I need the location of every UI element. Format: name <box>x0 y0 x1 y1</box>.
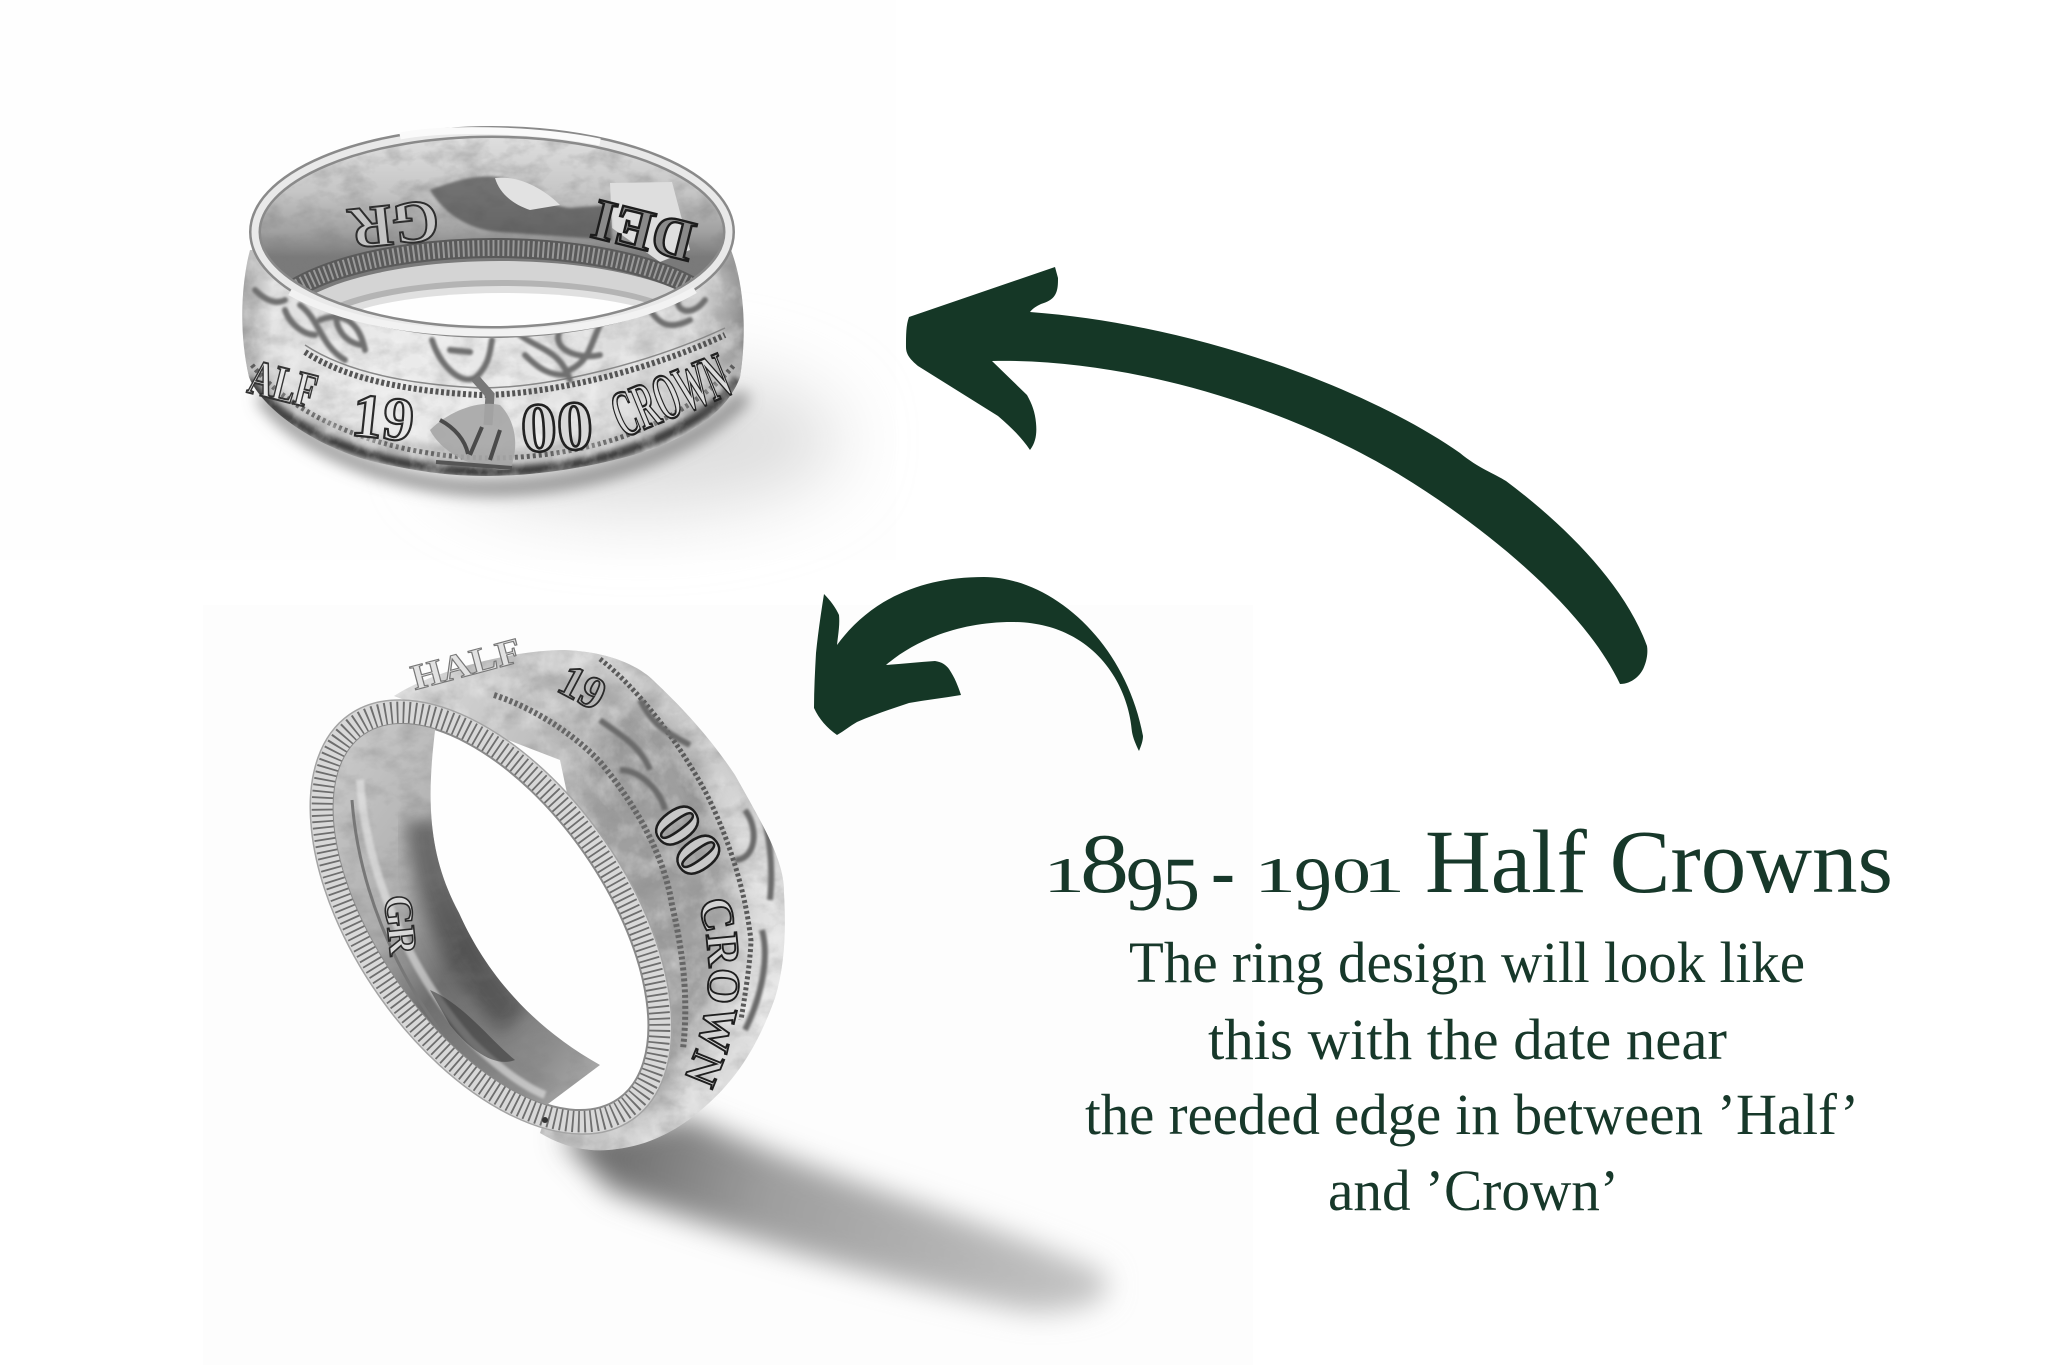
heading words: Half Crowns: Half Crowns <box>1425 813 1893 912</box>
coin text: HALF: HALF <box>407 630 525 698</box>
description line 2: this with the date near <box>1208 1007 1727 1072</box>
heading dash: - <box>1211 832 1235 912</box>
interior light shield <box>610 182 690 262</box>
top ring rim <box>255 131 729 333</box>
heading year digit 1: 1 <box>1363 847 1405 903</box>
description line 4: and ’Crown’ <box>1328 1158 1619 1223</box>
heading year digit 9: 9 <box>1126 843 1164 927</box>
description line 1: The ring design will look like <box>1129 930 1805 995</box>
ornament leaves on the wall <box>255 290 705 380</box>
bottom ring photo <box>310 590 1142 1326</box>
coin text: CROWN: CROWN <box>684 899 740 1091</box>
heading year digit 5: 5 <box>1162 843 1200 927</box>
heading year digit 0: 0 <box>1332 847 1371 903</box>
photo background: bottom ring <box>203 605 1253 1365</box>
ring opening <box>362 293 634 326</box>
bottom ring cast shadow <box>560 1118 1108 1312</box>
description line 3: the reeded edge in between ’Half’ <box>1085 1082 1859 1147</box>
description text <box>1085 930 1859 1223</box>
inside lettering: GR: GR <box>345 187 442 262</box>
heading year digit 1: 1 <box>1254 847 1296 903</box>
inside lettering: DEI: DEI <box>585 187 701 275</box>
top ring interior <box>261 138 723 326</box>
top ring photo <box>240 130 840 512</box>
small curved arrow pointing to bottom ring <box>814 577 1143 751</box>
interior reeded band <box>292 238 694 290</box>
coin text: 00: 00 <box>637 790 738 891</box>
interior lip <box>316 261 675 302</box>
coin text: CROWN: CROWN <box>601 339 740 452</box>
top ring soft shadow <box>262 368 840 512</box>
coin text: 19: 19 <box>550 654 615 720</box>
top ring outer wall with coin lettering <box>240 250 750 485</box>
photo background: top ring <box>0 0 896 560</box>
bottom ring inner wall <box>334 724 600 1104</box>
coin text: 00: 00 <box>519 387 595 468</box>
interior lion relief <box>430 176 612 240</box>
heading year digit 1: 1 <box>1043 847 1085 903</box>
bead rows <box>494 659 751 1049</box>
inside lettering: GR: GR <box>375 893 426 958</box>
bottom ring outer band <box>394 630 785 1150</box>
heading <box>1043 813 1893 927</box>
ornament on the band <box>600 700 771 1030</box>
coin text: ALF: ALF <box>243 348 323 419</box>
bottom ring reeded edge <box>237 636 745 1198</box>
coin text: 19: 19 <box>349 381 417 455</box>
infographic canvas <box>242 126 1890 1328</box>
heading year digit 8: 8 <box>1080 817 1129 911</box>
large curved arrow pointing to top ring <box>906 267 1647 684</box>
heading year digit 9: 9 <box>1294 843 1332 927</box>
